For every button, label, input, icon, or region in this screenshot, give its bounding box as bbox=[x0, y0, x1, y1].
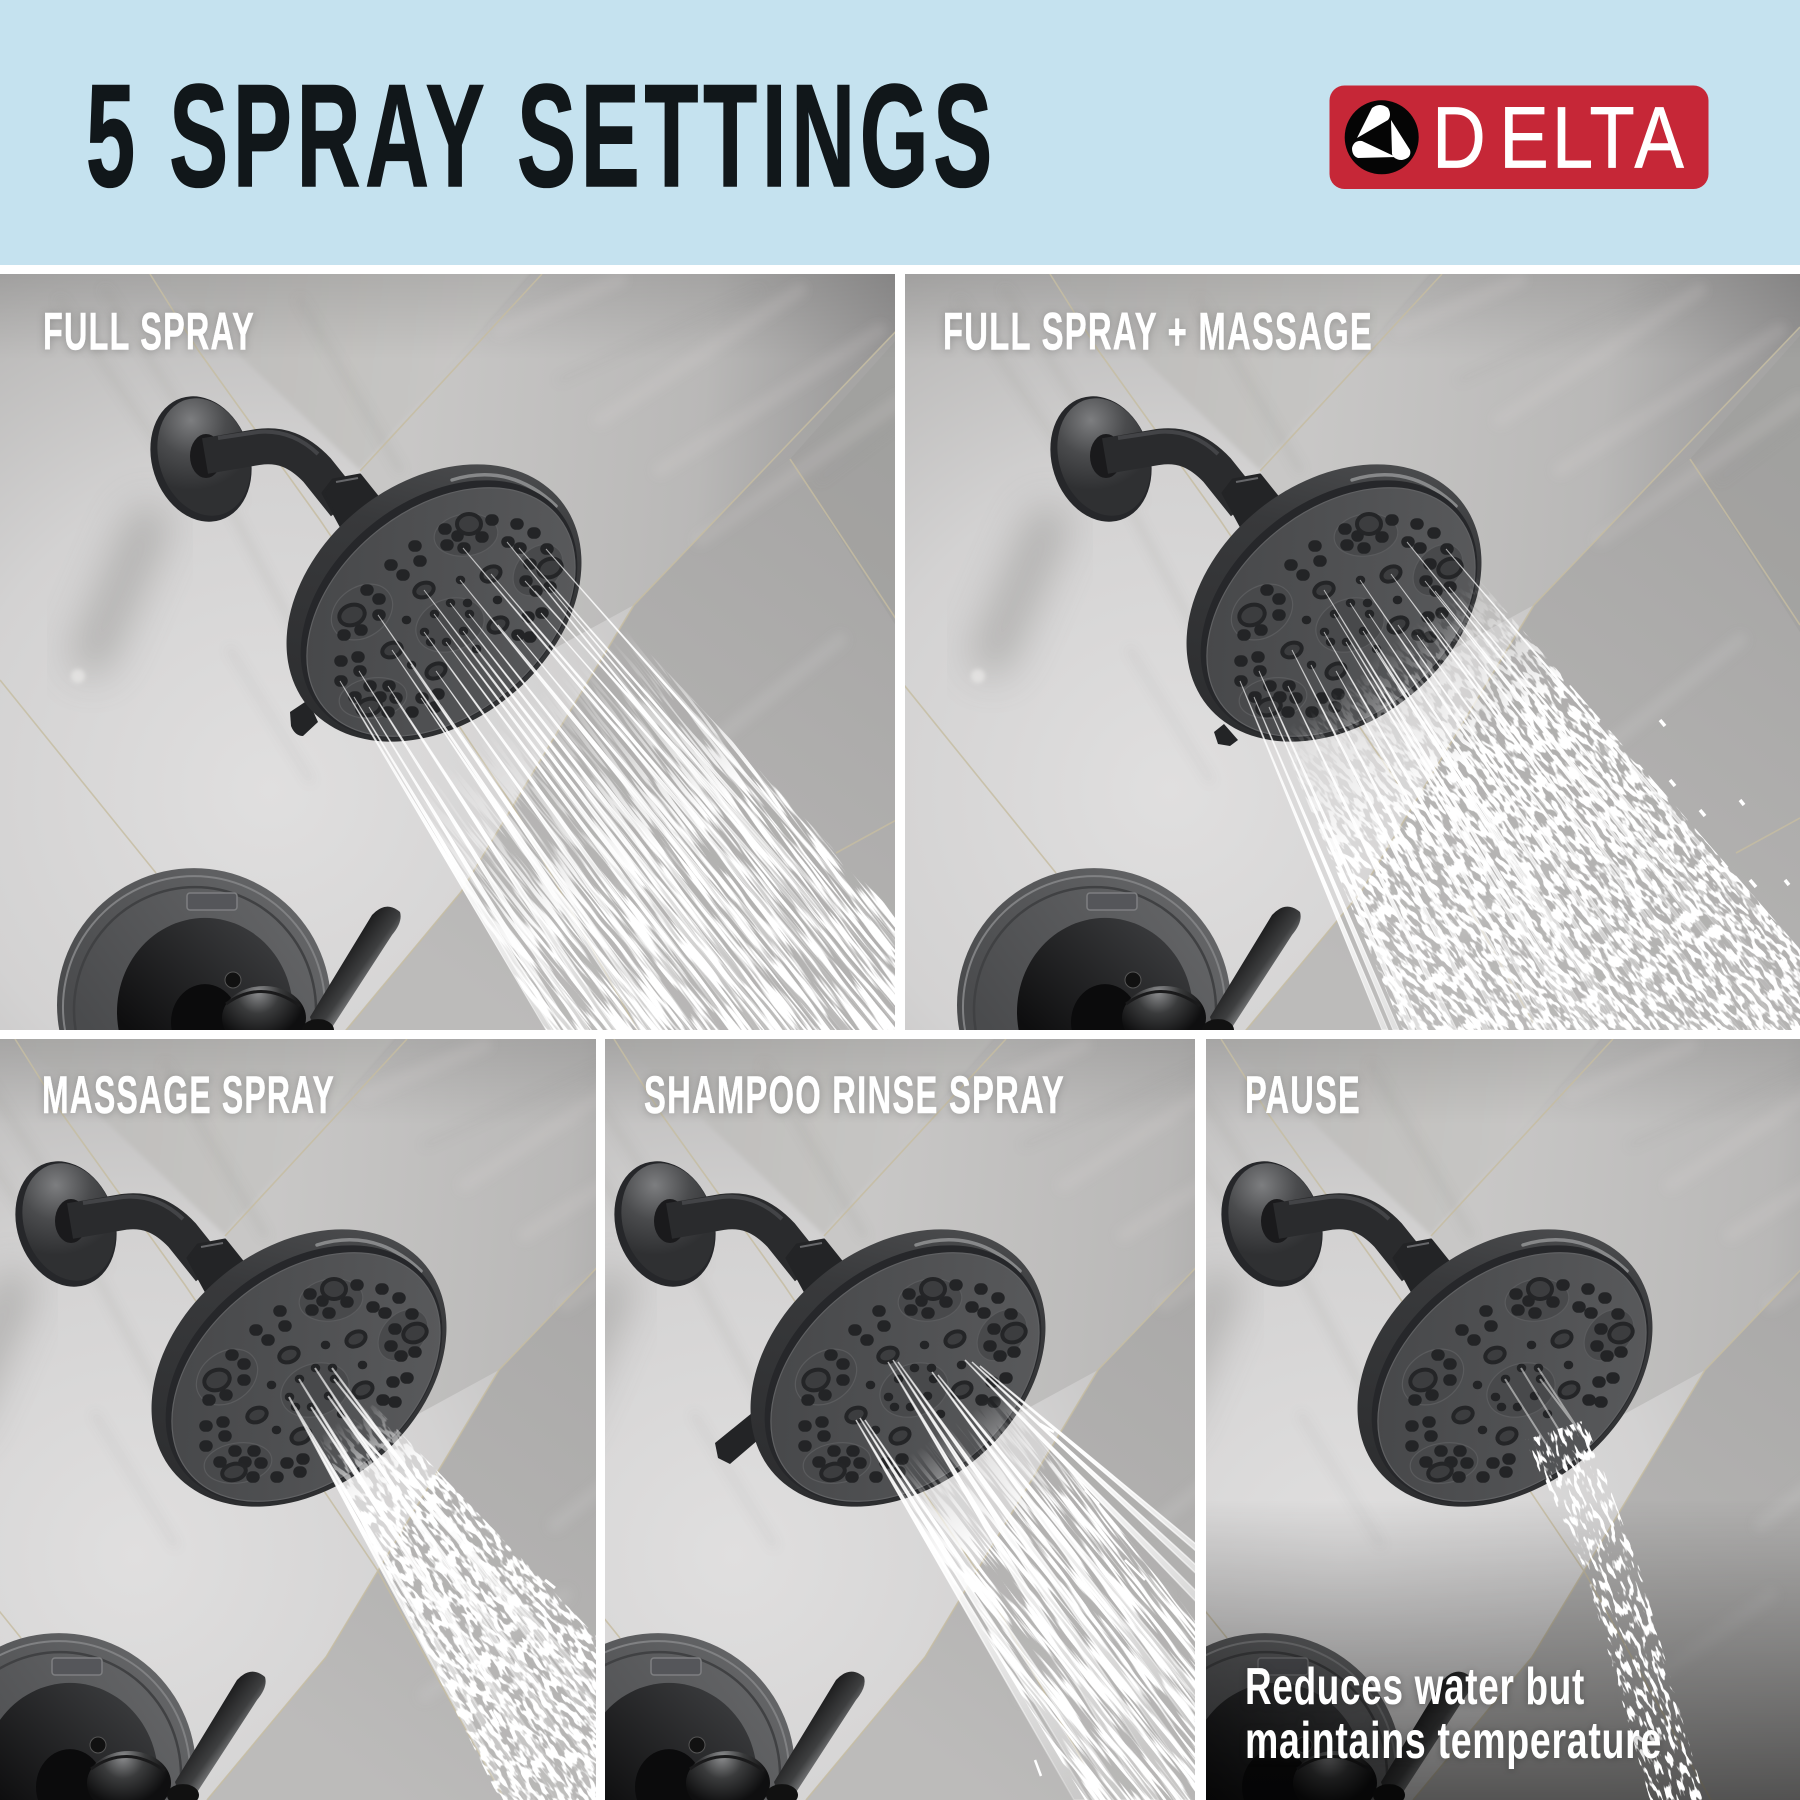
stray droplets bbox=[965, 1424, 1145, 1776]
logo: Delta bbox=[1330, 86, 1708, 189]
water streaks bbox=[340, 542, 899, 1030]
thin streams on head bbox=[1505, 1368, 1590, 1450]
label: MASSAGE SPRAY bbox=[42, 1066, 335, 1125]
panel: massage spray bbox=[0, 1039, 596, 1800]
dark gradient overlay bbox=[1206, 1500, 1800, 1800]
water droplets bbox=[1551, 1430, 1564, 1443]
panel: shampoo rinse spray bbox=[605, 1039, 1195, 1800]
diverter tab bbox=[715, 1413, 758, 1464]
water spray bbox=[1240, 542, 1799, 1030]
diverter tab bbox=[290, 700, 318, 736]
logo wordmark: DELTA bbox=[1432, 90, 1684, 187]
broken water spray bbox=[1372, 620, 1386, 634]
shower scene bbox=[464, 1035, 1369, 1800]
shower head bbox=[696, 1172, 1100, 1564]
label: FULL SPRAY bbox=[43, 302, 255, 362]
shower head bbox=[152, 1229, 446, 1507]
title: 5 SPRAY SETTINGS bbox=[86, 54, 997, 217]
header band bbox=[0, 0, 1800, 265]
shower head bbox=[286, 464, 582, 742]
shower scene bbox=[0, 1039, 596, 1800]
caption: Reduces water but bbox=[1245, 1658, 1585, 1716]
label: SHAMPOO RINSE SPRAY bbox=[644, 1066, 1065, 1125]
water streaks bbox=[1240, 542, 1799, 1030]
broken water spray bbox=[332, 1400, 346, 1414]
label: PAUSE bbox=[1245, 1066, 1361, 1125]
shower head bbox=[1186, 464, 1482, 742]
diverter tab bbox=[1214, 724, 1238, 746]
water streaks bbox=[288, 1367, 596, 1800]
stray droplets bbox=[460, 1580, 555, 1774]
shower scene bbox=[900, 270, 1800, 1035]
panel: full spray bbox=[0, 270, 905, 1035]
shower scene bbox=[0, 270, 905, 1035]
stray droplets bbox=[1660, 720, 1789, 997]
water streaks bbox=[856, 1360, 1385, 1800]
label: FULL SPRAY + MASSAGE bbox=[943, 302, 1373, 362]
shower head bbox=[1303, 1172, 1707, 1564]
panel: full spray + massage bbox=[900, 270, 1800, 1035]
icon: delta triangle mark bbox=[1345, 100, 1419, 174]
caption bbox=[1245, 1658, 1662, 1770]
shower scene bbox=[1071, 1035, 1800, 1800]
broken water spray bbox=[892, 1400, 906, 1414]
panel: pause bbox=[1071, 1035, 1800, 1800]
broken water spray bbox=[472, 620, 486, 634]
